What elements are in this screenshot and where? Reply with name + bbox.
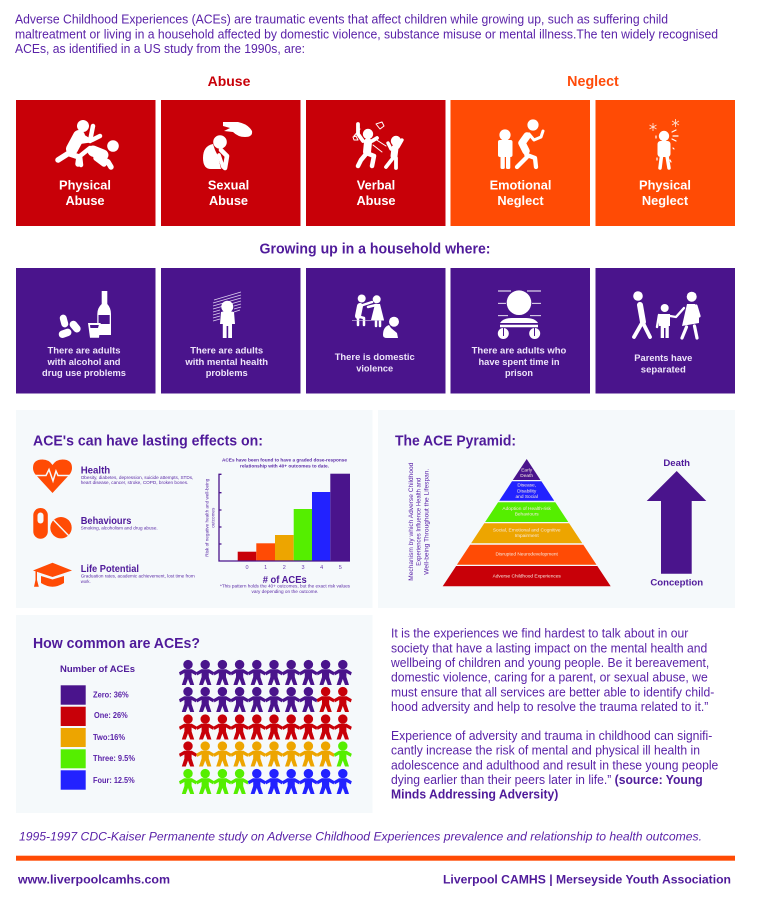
panel: how common [16,615,372,813]
intro text: ACEs, as identified in a US study from the 1990s, are: [15,42,305,56]
text: health [81,466,193,485]
level: adoption of behaviours: Behaviours [515,512,539,518]
arrow: conception to death: Death [663,458,690,469]
tile: verbal abuse: Abuse [356,193,396,208]
level: disease: Disease, [517,483,536,489]
vertical mechanism text: Mechanism by which Adverse Childhood [408,462,415,581]
legend: three: Three: 9.5% [93,754,135,763]
y axis label: Risk of negative health and well-being [204,478,209,557]
orange rule [16,856,735,861]
icon: domestic violence [352,294,399,338]
footer: organisations: Liverpool CAMHS | Merseyside Youth Association [443,872,731,886]
text block: quote: domestic violence, caring for a parent, or sexual abuse, we [391,671,708,685]
tile: verbal abuse [306,100,446,226]
text block: quote: wellbeing of children and young people. Be it bereavement, [390,656,709,670]
level: impairment [471,523,582,543]
tile: prison [450,268,590,394]
heading: how common: How common are ACEs? [33,636,200,652]
text block: quote: society that have a lasting impact on the mental health and [391,641,707,655]
intro text: Adverse Childhood Experiences (ACEs) are traumatic events that affect children while growing up, such as suffering child [15,13,668,27]
bars [238,474,350,560]
icon: graduation cap [33,563,72,587]
vertical mechanism text: Experiences Influence Health and [416,478,423,566]
arrow: conception to death: Conception [650,577,703,588]
legend: four: Four: 12.5% [93,776,135,785]
level: adoption of behaviours: Adoption of Health-risk [502,506,552,512]
tile: domestic violence [306,268,446,394]
text block: quote: Minds Addressing Adversity) [391,787,558,801]
level: neurodevelopment: Disrupted Neurodevelopment [495,552,559,558]
tile: sexual abuse: Sexual [208,178,249,192]
study citation: 1995-1997 CDC-Kaiser Permanente study on Adverse Childhood Experiences prevalence and relationship to health outcomes. [19,829,702,843]
text block: quote: must ensure that all services are better able to identify child- [391,685,714,699]
vertical mechanism text [408,462,430,581]
tile: prison: prison [505,368,533,379]
x axis numbers: 2 [283,565,286,571]
text block: quote: Experience of adversity and trauma in childhood can signifi- [391,729,712,743]
y axis label [204,478,215,557]
x axis numbers: 3 [301,565,305,571]
chart footnote: vary depending on the outcome. [252,589,318,594]
icon: bottle and pills [58,291,111,339]
tile: physical abuse: Abuse [65,193,105,208]
level: early death [513,459,540,480]
axes [219,474,350,561]
text: life potential [81,564,195,584]
tile: emotional neglect: Neglect [497,193,544,208]
tile: alcohol and drug use: There are adults [48,346,120,356]
level: early death: Early [521,468,533,474]
tile: prison: have spent time in [478,357,560,368]
level: early death: Death [520,473,533,479]
tile: verbal abuse: Verbal [357,178,395,192]
tile: physical abuse: Physical [59,178,111,192]
text block: quote: cantly increase the risk of mental and physical ill health in [391,744,700,758]
text block: quote [390,627,718,801]
text: life potential: work. [81,579,91,584]
level: disease: and Social [515,494,538,500]
pictogram: 50 people [179,660,352,794]
vertical mechanism text: Well-being Throughout the Lifespan. [423,469,430,575]
tile: emotional neglect [450,100,590,226]
text block: quote: It is the experiences we find hardest to talk about in our [391,627,688,641]
legend [60,663,135,790]
x axis numbers: 5 [339,565,342,571]
heading: Neglect: Neglect [567,74,619,90]
tile: physical abuse [16,100,156,226]
text: behaviours [81,516,158,530]
tile: mental health: problems [206,368,248,379]
legend: Number of ACEs [60,663,135,674]
icon: heart [33,460,72,493]
tile: alcohol and drug use [16,268,156,394]
icon: verbal abuse [353,122,402,168]
text: health: Obesity, diabetes, depression, suicide attempts, STDs, [81,475,193,480]
tile: domestic violence: There is domestic [335,352,415,363]
legend: one: One: 26% [94,711,128,720]
tile: sexual abuse: Abuse [209,193,248,208]
level: disease: Disability [517,488,537,494]
x axis numbers: 4 [320,565,323,571]
icon: person behind bars [498,290,541,339]
icon: person under lines [213,292,241,338]
tile: separated parents [596,268,735,394]
text: life potential: Graduation rates, academic achievement, lost time from [81,573,195,578]
chart title [222,458,347,468]
text block: quote: adolescence and adulthood and result in these young people [391,758,718,772]
panel: lasting effects [16,410,372,608]
tile: mental health: with mental health [184,357,268,368]
text: behaviours: Smoking, alcoholism and drug abuse. [81,526,158,530]
tile: emotional neglect: Emotional [490,178,551,192]
icon: pills [33,508,72,539]
tile: separated parents: Parents have [634,353,692,364]
chart footnote: *This pattern holds the 40+ outcomes, but the exact risk values [220,584,351,588]
footer: website: www.liverpoolcamhs.com [17,872,170,886]
tile: physical neglect: Physical [639,178,691,192]
legend: zero: Zero: 36% [93,690,129,700]
tile: prison: There are adults who [472,346,566,356]
x axis numbers: 1 [264,565,267,571]
legend: two: Two:16% [93,733,125,742]
tile: domestic violence: violence [356,364,393,374]
text: behaviours: Behaviours [81,516,132,527]
icon: physical neglect [650,119,679,168]
chart title: ACEs have been found to have a graded dose-response [222,458,347,463]
tile: alcohol and drug use: with alcohol and [47,357,121,368]
level: adverse experiences [443,566,611,586]
text block: quote: dying earlier than their peers later in life.” (source: Young [391,773,703,787]
chart title: relationship with 40+ outcomes to date. [240,464,329,468]
level: adverse experiences: Adverse Childhood Experiences [493,573,561,579]
icon: sexual abuse [203,122,252,169]
x axis numbers: 0 [245,565,249,571]
x axis title: # of ACEs [263,575,307,586]
heading: Abuse: Abuse [208,73,251,89]
text block: quote: hood adversity and help to resolve the trauma related to it.” [391,700,708,714]
level: neurodevelopment [457,545,596,565]
y axis label: outcomes [210,507,215,528]
level: impairment: Social, Emotional and Cognitive [493,528,561,534]
bar chart: risk by ACE count [204,458,351,594]
tile: mental health [161,268,300,394]
x axis numbers [245,565,342,571]
chart footnote [220,584,351,594]
tile: mental health: There are adults [190,346,263,356]
tile: physical neglect: Neglect [642,193,689,208]
tile: alcohol and drug use: drug use problems [42,368,126,379]
level: impairment: Impairment [515,533,539,539]
tile: separated parents: separated [641,364,686,376]
level: disease [499,481,554,501]
icon: emotional neglect [498,119,543,169]
level: adoption of behaviours [485,502,568,522]
icon: physical abuse [58,120,119,167]
heading: lasting effects: ACE's can have lasting effects on: [33,433,263,449]
intro text [15,13,718,56]
heading: growing up: Growing up in a household where: [260,242,490,258]
intro text: maltreatment or living in a household affected by domestic violence, substance misuse or mental illness.The ten widely recognised [15,27,718,41]
icon: family separated [633,291,699,338]
tile: sexual abuse [161,100,300,226]
panel: ACE pyramid [378,410,735,608]
heading: pyramid: The ACE Pyramid: [395,433,516,449]
text: health: Health [81,466,110,476]
arrow: conception to death [647,458,706,588]
tile: physical neglect [596,100,735,226]
text: life potential: Life Potential [81,564,139,575]
text: health: heart disease, cancer, stroke, COPD, broken bones. [81,480,188,485]
pyramid [443,459,611,586]
